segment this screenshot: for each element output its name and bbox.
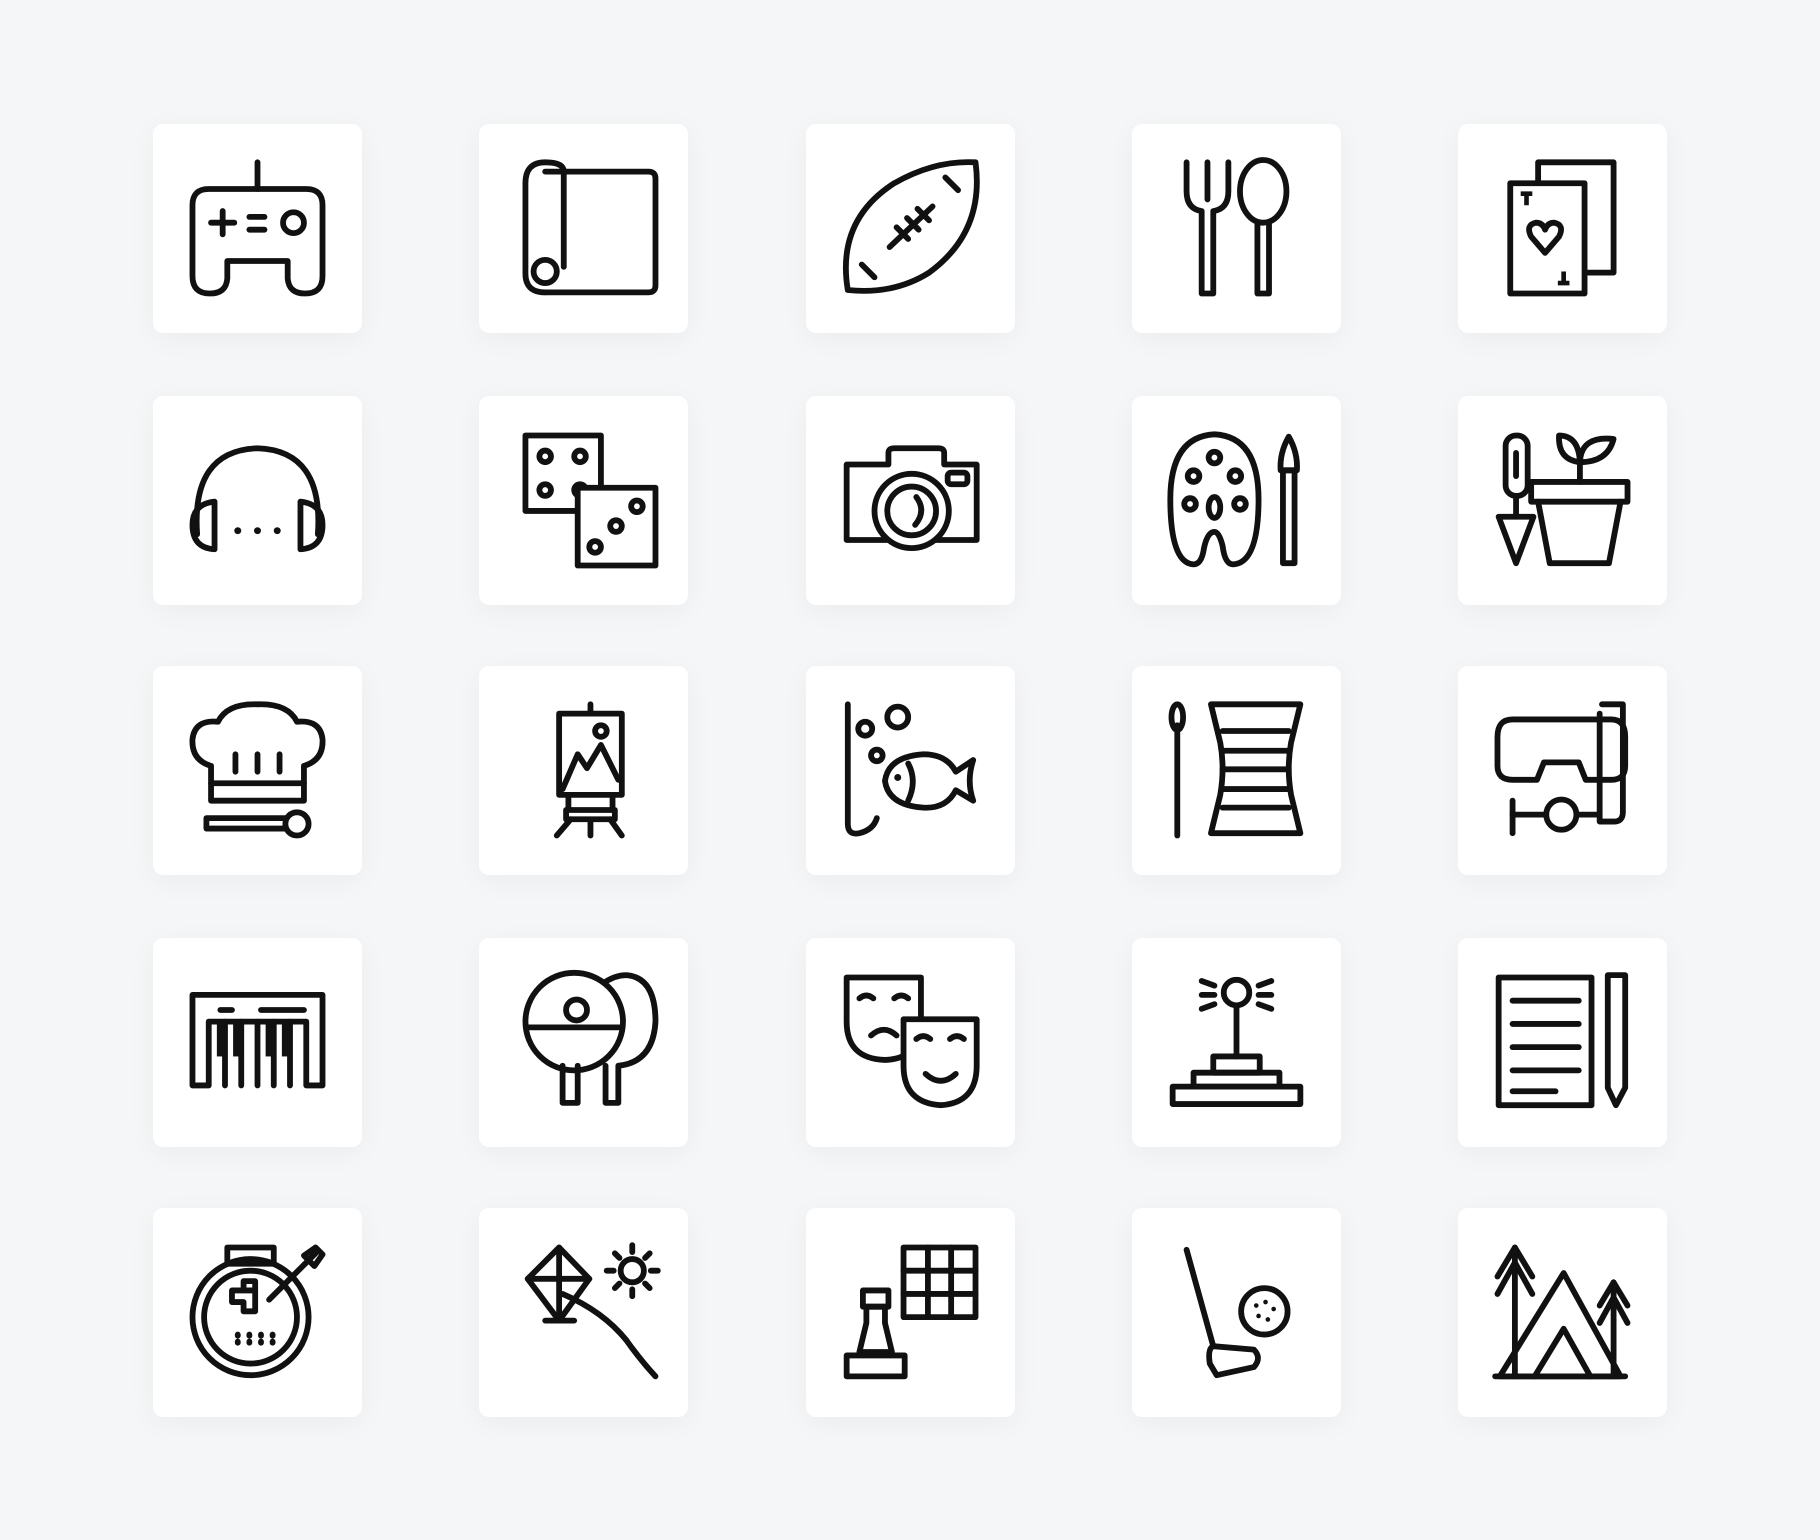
card: easel — [479, 666, 688, 875]
card: scroll map — [479, 124, 688, 333]
card: gamepad — [153, 124, 362, 333]
card: ping pong — [479, 938, 688, 1147]
card: needle and thread — [1132, 666, 1341, 875]
card: tent and trees — [1458, 1208, 1667, 1417]
card: palette and brush — [1132, 396, 1341, 605]
card: american football — [806, 124, 1015, 333]
card: notepad — [1458, 938, 1667, 1147]
card: embroidery hoop — [153, 1208, 362, 1417]
card: camera — [806, 396, 1015, 605]
card: chess — [806, 1208, 1015, 1417]
card: theater masks — [806, 938, 1015, 1147]
card: fishing — [806, 666, 1015, 875]
card: playing cards — [1458, 124, 1667, 333]
card: headphones — [153, 396, 362, 605]
card: dice — [479, 396, 688, 605]
card: kite and sun — [479, 1208, 688, 1417]
card: joystick podium — [1132, 938, 1341, 1147]
card: gardening — [1458, 396, 1667, 605]
card: piano — [153, 938, 362, 1147]
card: golf — [1132, 1208, 1341, 1417]
card: diving mask — [1458, 666, 1667, 875]
card: chef hat — [153, 666, 362, 875]
card: fork and spoon — [1132, 124, 1341, 333]
